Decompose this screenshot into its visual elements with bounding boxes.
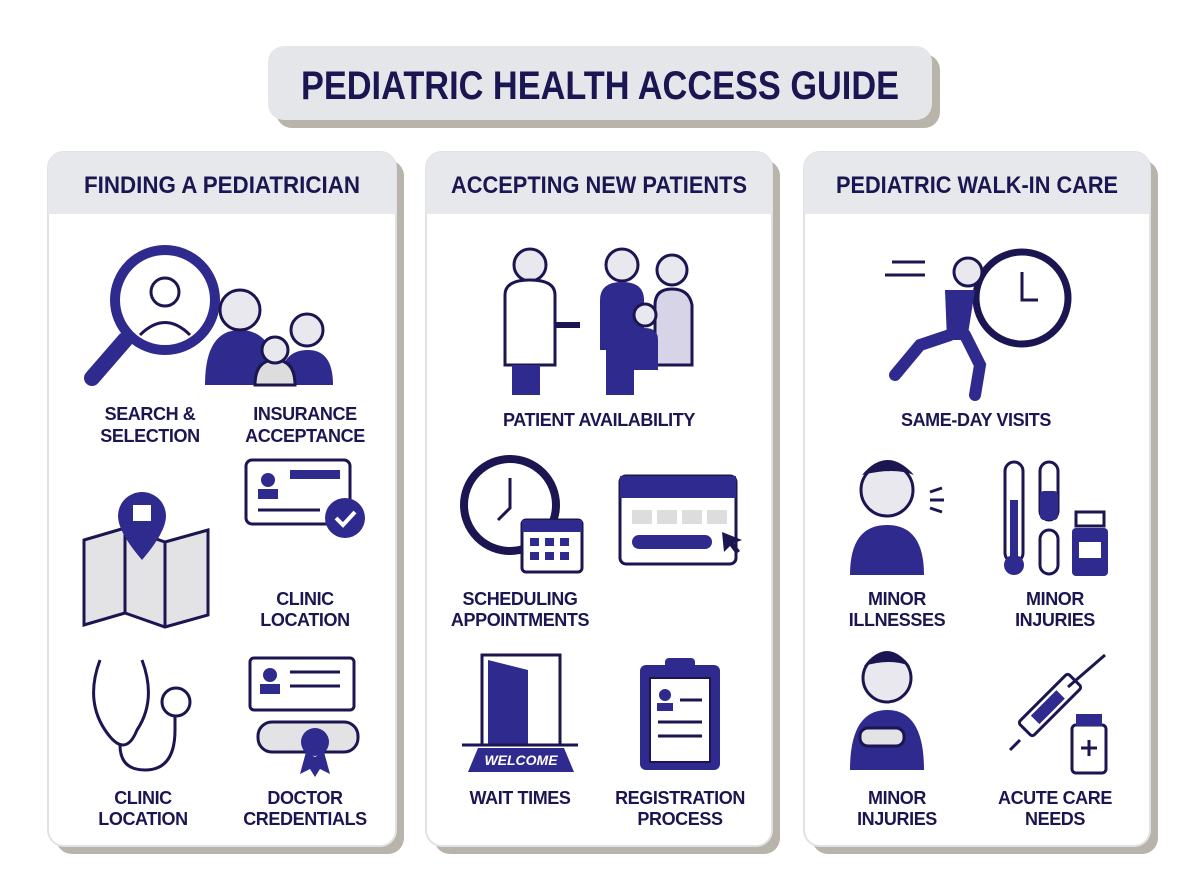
label: minor injuries (bottom): MINOR — [868, 788, 926, 808]
icon: door with welcome mat — [462, 655, 578, 772]
label: doctor credentials: DOCTOR — [267, 788, 343, 808]
label: insurance acceptance: ACCEPTANCE — [245, 426, 365, 446]
label: registration process: PROCESS — [637, 809, 723, 829]
label: acute care needs: ACUTE CARE — [998, 788, 1112, 808]
label: clinic location (top): CLINIC — [276, 589, 334, 609]
heading: walk-in: PEDIATRIC WALK-IN CARE — [836, 172, 1118, 199]
label: clinic location (top): LOCATION — [260, 610, 350, 630]
label: scheduling appointments: SCHEDULING — [462, 589, 578, 609]
label: minor injuries (top): MINOR — [1026, 589, 1084, 609]
icon: insurance card — [246, 460, 365, 538]
icon: door with welcome mat: WELCOME — [484, 752, 558, 768]
icon: magnifier and family — [92, 250, 333, 385]
icon: coughing child — [850, 460, 944, 575]
title — [268, 46, 940, 128]
panel: pediatric walk-in care — [804, 152, 1158, 854]
heading: finding: FINDING A PEDIATRICIAN — [84, 172, 360, 199]
label: acute care needs — [998, 788, 1112, 829]
label: minor illnesses — [849, 589, 946, 630]
icon: clipboard — [640, 658, 720, 770]
label: doctor credentials — [243, 788, 367, 829]
label: minor injuries (bottom): INJURIES — [857, 809, 937, 829]
label: same-day visits: SAME-DAY VISITS — [901, 410, 1051, 430]
label: clinic location (top) — [260, 589, 350, 630]
label: insurance acceptance: INSURANCE — [253, 404, 357, 424]
label: minor illnesses: ILLNESSES — [849, 610, 946, 630]
panel: finding a pediatrician — [48, 152, 404, 854]
label: scheduling appointments — [451, 589, 589, 630]
icon: running doctor with clock — [885, 252, 1068, 395]
label: clinic location (bottom) — [98, 788, 188, 829]
icon: thermometer and pills — [1004, 462, 1108, 576]
label: search & selection — [100, 404, 200, 446]
label: insurance acceptance — [245, 404, 365, 446]
icon: credentials — [250, 658, 358, 777]
icon: map with pin — [84, 492, 208, 627]
label: scheduling appointments: APPOINTMENTS — [451, 610, 589, 630]
icon: doctor handshake with family — [505, 249, 692, 395]
label: patient availability: PATIENT AVAILABILITY — [503, 410, 695, 430]
label: clinic location (bottom): CLINIC — [114, 788, 172, 808]
icon: calendar booking — [620, 476, 742, 564]
label: doctor credentials: CREDENTIALS — [243, 809, 367, 829]
label: search & selection: SELECTION — [100, 426, 200, 446]
label: minor injuries (top): INJURIES — [1015, 610, 1095, 630]
label: acute care needs: NEEDS — [1025, 809, 1085, 829]
icon: syringe and vial — [1010, 655, 1106, 773]
label: search & selection: SEARCH & — [105, 404, 196, 424]
label: wait times: WAIT TIMES — [470, 788, 571, 808]
title: PEDIATRIC HEALTH ACCESS GUIDE — [301, 64, 899, 108]
label: minor injuries (bottom) — [857, 788, 937, 829]
label: registration process: REGISTRATION — [615, 788, 745, 808]
label: minor injuries (top) — [1015, 589, 1095, 630]
icon: clock with calendar — [464, 459, 582, 572]
label: minor illnesses: MINOR — [868, 589, 926, 609]
label: registration process — [615, 788, 745, 829]
icon: stethoscope — [94, 660, 190, 770]
panel: accepting new patients — [426, 152, 780, 854]
label: clinic location (bottom): LOCATION — [98, 809, 188, 829]
heading: accepting: ACCEPTING NEW PATIENTS — [451, 172, 747, 199]
icon: child with arm sling — [850, 651, 924, 770]
